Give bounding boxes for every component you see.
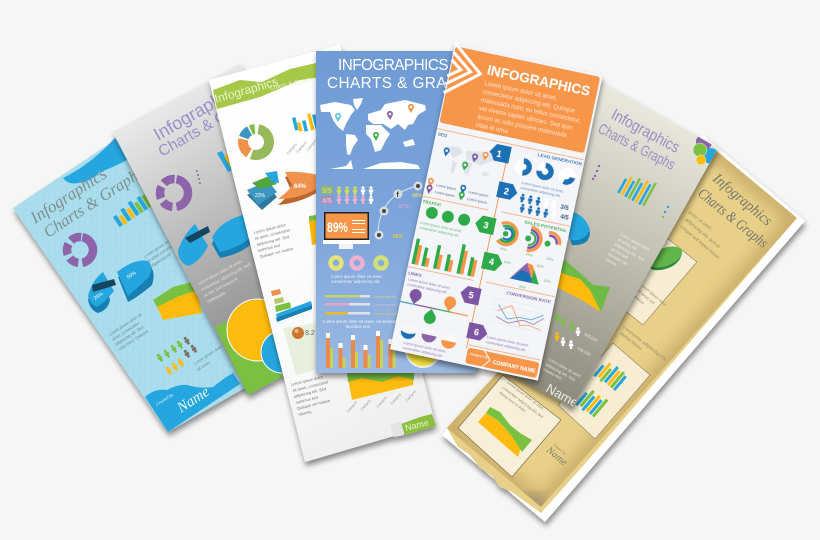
header body text: Lorem ipsum dolor sit amet,: [484, 81, 558, 102]
3D pie chart: 55%: [126, 270, 138, 281]
ratio 4/5 row: [321, 195, 373, 205]
arc labels: 25%: [546, 257, 554, 262]
lower body text: Quisque vel massa: [296, 398, 331, 411]
body text: Lorem ipsum dolor: [193, 343, 224, 366]
corner logo circles: [692, 136, 717, 166]
body text: adipiscing elit. Sed: [256, 234, 290, 247]
paper note: green pie: sit amet, elit: [636, 288, 657, 306]
header title: [213, 74, 314, 106]
yellow donut behind card: [406, 333, 440, 367]
bar chart axis labels: Category: [286, 142, 298, 156]
caption two: Lorem ipsum dolor sit amet, consectetur: [323, 319, 398, 324]
lower text: Lorem dolor sit amet,: [548, 357, 583, 379]
header title: Charts & Graphs: [269, 77, 314, 92]
bowls caption: consectetur adipiscing elit.: [402, 346, 443, 358]
footer company bar: COMPANY NAME: [492, 360, 536, 375]
lower body text: lobortis.: [298, 409, 313, 417]
lower body text: [290, 374, 331, 417]
paper note: area chart: Lorem ipsum dolor sit amet,: [505, 379, 545, 412]
torn blue header: [63, 138, 127, 183]
SEO legend: [425, 177, 490, 206]
parchment intro text: massa massa: [619, 332, 643, 352]
legend dots: [592, 165, 600, 180]
bubble chart plot: [283, 323, 316, 375]
header body text: malesuada nunc eu tellus consectetur,: [480, 98, 582, 125]
3D pie chart: [88, 260, 154, 313]
purple donut: [158, 177, 190, 209]
donut chart: [238, 124, 274, 160]
triangle labels: 45%: [519, 285, 526, 290]
orange bar chart: [326, 331, 396, 368]
body text: sit amet, consectetur: [254, 227, 292, 241]
arc labels: [499, 247, 554, 262]
badge 1: 1: [496, 149, 503, 159]
body text: massa: [605, 257, 618, 267]
body text: sit amet consect: [146, 243, 174, 264]
bar chart: [617, 169, 657, 207]
blue circle: [261, 331, 303, 373]
grey body text: [197, 258, 251, 304]
body text: Lorem ipsum dolor sit: [108, 311, 143, 337]
parchment title: [694, 170, 775, 252]
3D pie chart: 23%: [255, 193, 266, 199]
world map: [320, 98, 426, 169]
triangle area chart: [509, 260, 543, 285]
lead caption: Lorem ipsum dolor sit amet,: [521, 181, 564, 194]
area chart axis labels: Category: [376, 395, 388, 409]
body text: adipiscing elit. Sed: [614, 242, 645, 262]
parchment intro text: congue sed massa massa: [679, 225, 721, 261]
three donuts: [330, 258, 386, 268]
title: CHARTS & GRAPHS: [327, 75, 480, 92]
parchment intro text: [619, 211, 721, 363]
parchment title: Charts & Graphs: [694, 186, 771, 252]
body text: nutrimus sed: [257, 243, 280, 253]
arc labels: 45%: [525, 252, 533, 258]
triangle labels: 55%: [536, 264, 544, 269]
bar chart: [292, 113, 319, 132]
section dividers: [394, 128, 584, 361]
grey panel title: Infographics: [150, 78, 245, 144]
SEO legend: Lorem ipsum: [468, 190, 489, 198]
header body text: vel viverra sapien ultricies. Sed quis: [478, 106, 573, 132]
people labels: [577, 332, 599, 357]
paper note: area chart: consectetur adipiscing elit. Sed: [501, 385, 545, 419]
blue pie: [560, 210, 590, 245]
header body text: ipsum ac odio posuere malesuada: [477, 114, 568, 139]
SEO legend: Lorem ipsum: [434, 190, 455, 198]
body text: at nisl sed: [611, 247, 629, 260]
triangle labels: 40%: [503, 260, 511, 265]
people pictograms: [156, 336, 198, 376]
bar chart axis labels: Category: [306, 138, 318, 152]
panel: blue infographic: [316, 51, 480, 373]
area chart: [153, 282, 202, 320]
paper note: green pie: Lorem ipsum dolor: [639, 282, 668, 307]
title: [327, 57, 480, 92]
area chart: [556, 260, 610, 312]
links caption: Lorem ipsum dolor sit amet,: [408, 277, 451, 290]
title: INFOGRAPHICS: [338, 57, 449, 74]
arc labels: 75%: [499, 247, 507, 252]
caption: consectetur adipiscing elit.: [331, 279, 380, 284]
grey body text: at nisl. Sed massa et: [203, 276, 239, 298]
name badge: Name: [404, 417, 430, 433]
progress bars: [325, 295, 396, 316]
social network arc: [374, 182, 423, 240]
progress bars: Lorem ipsum: [374, 295, 396, 299]
ratio 4/5 row: 4/5: [322, 198, 332, 205]
bar chart axis labels: [286, 138, 318, 156]
panel: parchment infographic: [442, 135, 805, 526]
area chart: [347, 373, 414, 400]
body text: sit amet: [196, 360, 211, 372]
bar chart: [111, 192, 153, 228]
social network arc: f: [396, 192, 400, 199]
badge 6: [466, 322, 489, 342]
lower text: massa nibh.: [543, 367, 564, 381]
parchment vignette: [447, 142, 797, 526]
body text: [253, 222, 294, 259]
3D horizontal bars: [271, 289, 312, 322]
traffic bar chart: [411, 234, 480, 277]
parchment intro text: consectetur adipiscing elit.: [622, 326, 667, 363]
map pins: [335, 104, 414, 141]
right legend dots: [662, 206, 669, 218]
body text: [605, 232, 651, 267]
badge 4: 4: [488, 256, 495, 267]
links caption: consectetur adipiscing elit.: [407, 282, 448, 295]
panel: light-blue textured infographic: [13, 138, 285, 432]
rainbow arc charts: [496, 220, 562, 257]
body text: adipiscing elit. Sed: [114, 324, 145, 347]
people rows: [517, 193, 572, 222]
lead donuts: [513, 157, 577, 186]
3D pie chart: [247, 171, 318, 210]
traffic circles: [425, 206, 471, 227]
area chart axis labels: [346, 389, 417, 414]
social network arc: 86%: [393, 234, 404, 240]
badge 3: 3: [482, 220, 489, 231]
people labels: 845,000: [584, 332, 599, 343]
small bar chart: [217, 151, 236, 172]
parchment footer name: Created by: [552, 443, 567, 456]
title: Infographics: [608, 107, 682, 157]
3D pie chart: 25%: [93, 291, 105, 302]
caption: Lorem ipsum dolor sit amet,: [331, 274, 383, 279]
social network arc: 45%: [412, 193, 423, 199]
header title: Infographics: [213, 74, 280, 106]
line chart: [488, 297, 548, 333]
lower body text: adipiscing elit. Sed: [293, 386, 327, 399]
progress bars: Lorem ipsum: [374, 312, 396, 316]
badge 4: [481, 252, 504, 272]
title: [595, 107, 682, 174]
caption two: faucibus erat.: [346, 324, 371, 329]
header title: INFOGRAPHICS: [486, 62, 592, 99]
badge 3: [474, 214, 497, 235]
body text: Lorem ipsum dolor: [143, 236, 174, 259]
bubble chart plot: 8.2: [305, 330, 315, 337]
grey body text: Lorem ipsum dolor sit amet,: [197, 258, 243, 286]
LINKS label: LINKS: [408, 270, 422, 278]
bowls caption: Lorem ipsum dolor sit amet,: [403, 341, 446, 354]
title: Infographics: [26, 164, 110, 228]
torn blue footer with name: [145, 373, 240, 432]
torn blue footer with name: Name: [174, 384, 213, 417]
name badge: [390, 414, 436, 437]
people labels: 435,000: [577, 346, 592, 357]
people rows: 4/5: [560, 214, 570, 222]
conversion caption: consectetur adipiscing elit.: [485, 340, 526, 352]
parchment title: Infographics: [709, 170, 775, 229]
legend dots: [196, 170, 201, 184]
orange header: [439, 46, 600, 153]
footer company bar: [465, 346, 540, 379]
body text: sit amet, elit: [617, 237, 638, 252]
area chart axis labels: Category: [405, 389, 417, 403]
body text: adipiscing elit: [149, 251, 172, 269]
SEO legend: Lorem ipsum: [467, 197, 487, 205]
monitor with 89%: [323, 212, 370, 249]
lower body text: Lorem ipsum dolor: [290, 374, 324, 387]
grey body text: malesuada.: [206, 290, 227, 304]
badge 5: [459, 285, 482, 306]
paper note: area chart: [458, 375, 561, 477]
parchment footer name: Name: [543, 444, 569, 469]
torn blue footer with name: Created by: [155, 392, 174, 407]
links timeline: [397, 286, 471, 331]
traffic caption: Lorem ipsum dolor sit amet,: [420, 221, 463, 234]
header body text: vitae id urna.: [475, 123, 510, 136]
paper note: area chart: massa nunc et dolor: [498, 390, 528, 414]
grey body text: consectetur adipiscing elit. Sed: [200, 262, 251, 292]
green torn header: [213, 63, 316, 109]
lower body text: nutrimus sed: [295, 395, 318, 405]
3D pie chart: [178, 214, 250, 266]
SEO pins: [440, 143, 489, 175]
paper note: green pie: massa: [633, 294, 646, 306]
parchment intro text: adipiscing elit. Sed sit: [684, 218, 721, 250]
people rows: 3/5: [560, 205, 570, 212]
badge 2: 2: [503, 186, 510, 197]
caption: [331, 274, 383, 284]
three bowls: [399, 323, 458, 350]
paper note: bar charts: [558, 343, 650, 439]
header body text: consectetur adipiscing elit. Quisque: [482, 89, 576, 115]
small chart: [309, 215, 316, 245]
conversion caption: Lorem ipsum dolor sit amet,: [486, 335, 529, 348]
body text: [108, 236, 224, 372]
ratio 3/5 row: [321, 186, 373, 195]
triangle labels: [499, 257, 554, 295]
bar chart axis labels: Category: [296, 140, 308, 154]
panel: beige-grey infographic: [492, 70, 722, 414]
badge 2: [496, 181, 519, 201]
body text: Quisque vel: [608, 252, 629, 266]
green footer block: [215, 285, 375, 395]
area chart axis labels: Category: [390, 392, 402, 406]
badge 6: 6: [473, 327, 480, 338]
body text: nulla nunc, Quisque: [117, 328, 150, 352]
purple donut chart: [65, 235, 95, 265]
body text: Quisque vel massa: [259, 246, 294, 259]
lead caption: consectetur adipiscing elit.: [520, 186, 561, 198]
caption two: [323, 319, 398, 329]
name: Name: [544, 381, 581, 410]
TRAFFIC label: TRAFFIC: [422, 199, 443, 208]
triangle labels: 60%: [543, 279, 551, 284]
area chart axis labels: Category: [360, 398, 372, 412]
footer company bar: Designed by: [469, 352, 489, 360]
panel: white infographic with green torn header: [209, 45, 436, 462]
title: Charts & Graphs: [40, 162, 147, 241]
LEAD GENERATION heading: LEAD GENERATION: [537, 152, 583, 167]
grey panel title: Charts & Graphs: [156, 88, 264, 160]
panel: grey infographic with green base: [113, 64, 375, 395]
ratio 3/5 row: 3/5: [322, 188, 332, 195]
body text: amet, consectetur: [111, 320, 141, 342]
paper note: green pie: [600, 238, 697, 325]
SEO legend: Lorem ipsum: [436, 183, 457, 191]
title: Charts & Graphs: [595, 120, 678, 174]
panel: orange infographic (front card): [389, 43, 603, 381]
SEO world map: [438, 143, 495, 181]
people pictograms: [555, 313, 580, 349]
header body text: [475, 81, 585, 150]
social network arc: 57%: [399, 204, 410, 210]
header chevrons: [444, 43, 486, 99]
body text: Lorem ipsum dolor: [253, 222, 287, 235]
SALES POTENTIAL heading: SALES POTENTIAL: [524, 219, 568, 233]
traffic caption: consectetur adipiscing elit.: [419, 226, 460, 238]
lower text: adipiscing elit. Sed: [545, 362, 576, 382]
body text: Lorem ipsum dolor: [620, 232, 651, 252]
lower body text: sit amet, consectetur: [292, 379, 330, 393]
SEO label: SEO: [437, 131, 448, 138]
CONVERSION RATE heading: CONVERSION RATE: [506, 290, 551, 304]
progress bars: Lorem ipsum: [374, 303, 396, 307]
area chart axis labels: Category: [346, 400, 358, 414]
timeline spine: [466, 157, 508, 348]
3D pie chart: 64%: [294, 184, 307, 190]
badge 1: [488, 143, 512, 164]
badge 5: 5: [468, 290, 475, 301]
monitor with 89%: 89%: [327, 219, 348, 235]
parchment intro text: dolor sit amet,: [687, 211, 713, 232]
yellow circle: [227, 299, 289, 361]
